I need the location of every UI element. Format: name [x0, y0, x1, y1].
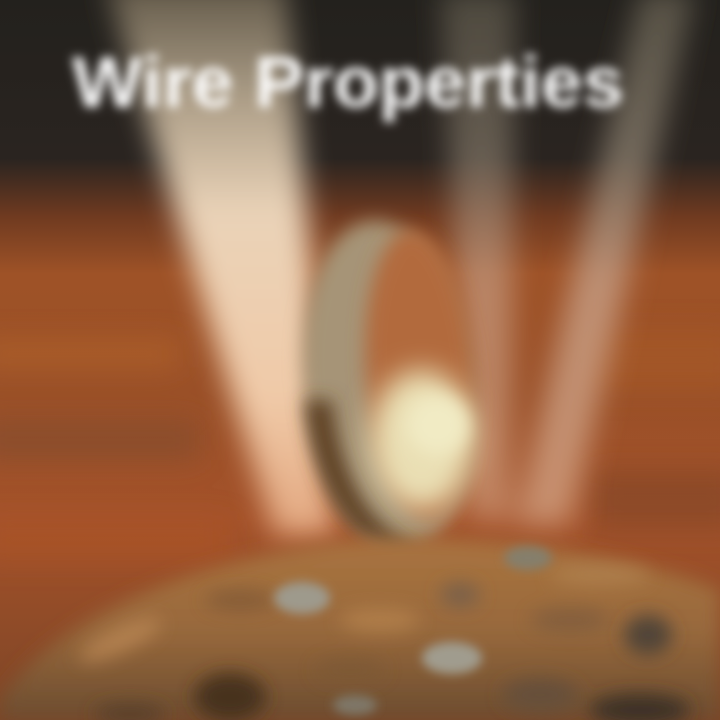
mound grey spots: [274, 546, 552, 715]
mound dark patches: [94, 583, 690, 720]
main light beam: [105, 0, 335, 535]
ring lower dark edge: [305, 400, 425, 552]
title: Wire Properties: [72, 43, 624, 123]
ring: [287, 212, 489, 558]
ring inner highlight: [370, 370, 474, 510]
right light beams: [440, 0, 695, 525]
textured mound: [0, 539, 720, 720]
ring inner opening: [356, 227, 484, 523]
mound texture patches: [74, 565, 650, 682]
wood grain bands: [0, 330, 720, 560]
ring outer band: [287, 212, 489, 558]
